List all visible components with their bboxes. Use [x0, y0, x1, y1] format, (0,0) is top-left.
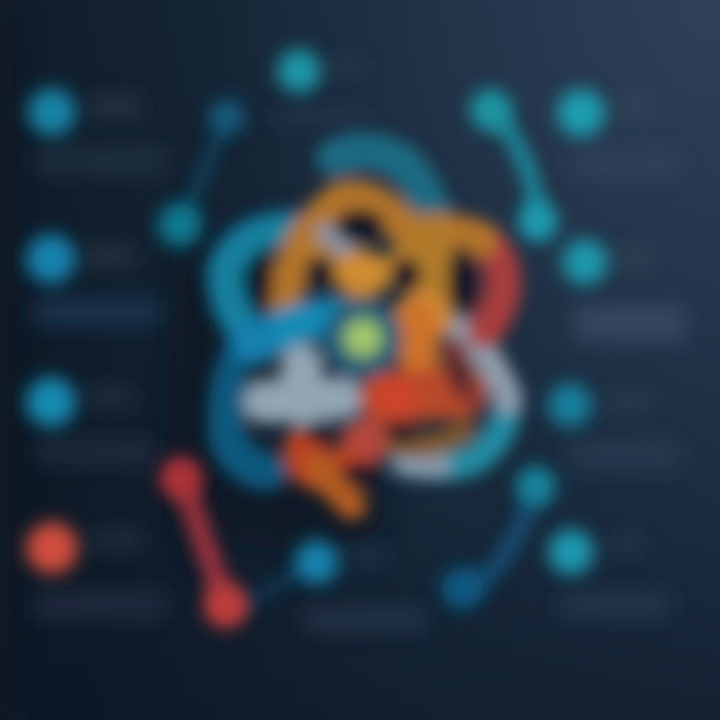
icon: upper right node: [470, 89, 512, 131]
icon: node left 2: [26, 234, 76, 284]
icon: node right 2: [562, 239, 608, 285]
orbit: teal top arc: [335, 151, 435, 220]
connector: red link: [182, 478, 226, 606]
nodes: left column: [26, 88, 78, 574]
panel: left text placeholders: [35, 95, 165, 620]
icon: bottom right node: [441, 567, 483, 609]
orbit: teal bottom right: [405, 395, 508, 466]
icon: top node: [277, 49, 321, 93]
icon: lower right node: [516, 466, 556, 506]
orbit: grey right: [452, 322, 508, 400]
atom diagram: [224, 151, 508, 505]
orbit: blue left ring: [224, 228, 300, 472]
icon: node left 1: [28, 88, 76, 136]
blob: white segment: [265, 365, 342, 405]
icon: right small node: [518, 202, 558, 242]
panel: right text placeholders: [560, 95, 685, 618]
connector lines: [182, 110, 538, 606]
blob: blue segment: [255, 318, 345, 345]
core: centre circle: [322, 298, 402, 378]
blob: orange stem: [418, 320, 420, 395]
icon: bottom node: [295, 540, 339, 584]
icon: upper left small node: [209, 99, 245, 135]
icon: node right 4: [548, 529, 594, 575]
icon: node right 3: [548, 383, 592, 427]
nodes: inner satellites: [158, 49, 558, 628]
fill: orange interior: [320, 245, 425, 290]
orbit: red right: [470, 235, 503, 330]
icon: node left 3: [26, 377, 76, 427]
blob: orange core: [338, 250, 386, 290]
blob: red-orange segment: [385, 392, 462, 398]
icon: left small node: [158, 203, 202, 247]
icon: node right 1: [557, 89, 605, 137]
icon: node left 4 (red): [26, 522, 78, 574]
panel: top and bottom text placeholders: [275, 58, 425, 631]
orbit: orange top: [285, 198, 480, 300]
nodes: right column: [548, 89, 608, 575]
holes: dark gaps: [242, 209, 476, 486]
icon: red lower node: [204, 584, 248, 628]
icon: red upper node: [160, 457, 202, 499]
